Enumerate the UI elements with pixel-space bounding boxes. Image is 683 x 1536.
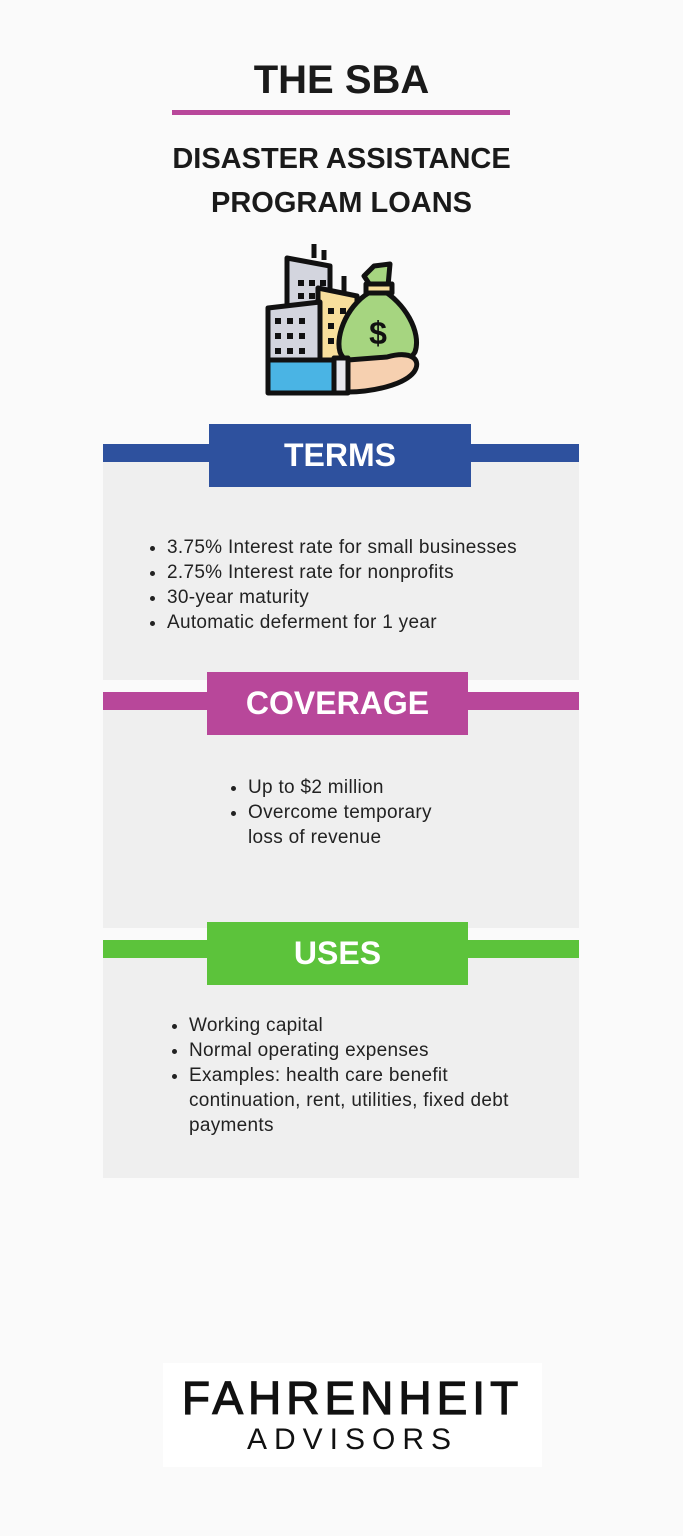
text: uses list: Working capital: [189, 1015, 323, 1036]
text: terms list: 2.75% Interest rate for nonprofits: [167, 562, 454, 583]
icon: buildings and money bag: [266, 244, 420, 396]
text: terms list: [150, 537, 517, 633]
heading: terms: TERMS: [284, 437, 396, 473]
text: uses list: Examples: health care benefit: [189, 1065, 448, 1086]
subtitle: PROGRAM LOANS: [211, 187, 472, 219]
logo: Fahrenheit Advisors: FAHRENHEIT: [182, 1372, 523, 1424]
heading: coverage: [207, 672, 468, 735]
text: coverage list: loss of revenue: [248, 827, 381, 848]
text: uses list: [172, 1015, 509, 1136]
divider line: [172, 110, 510, 115]
text: uses list: Normal operating expenses: [189, 1040, 429, 1061]
heading: coverage: COVERAGE: [246, 685, 429, 721]
title: THE SBA: [254, 58, 429, 102]
panel: uses: [103, 922, 579, 1178]
text: uses list: continuation, rent, utilities, fixed debt: [189, 1090, 509, 1111]
subtitle: DISASTER ASSISTANCE: [172, 143, 511, 175]
heading: uses: USES: [294, 935, 381, 971]
heading: uses: [207, 922, 468, 985]
logo: Fahrenheit Advisors: ADVISORS: [247, 1423, 458, 1456]
panel: terms: [103, 424, 579, 680]
text: terms list: Automatic deferment for 1 year: [167, 612, 437, 633]
panel: coverage: [103, 672, 579, 928]
icon: buildings and money bag: $: [369, 315, 387, 351]
text: coverage list: [231, 777, 432, 848]
subtitle: [172, 143, 511, 219]
text: uses list: payments: [189, 1115, 274, 1136]
heading: terms: [209, 424, 471, 487]
text: terms list: 30-year maturity: [167, 587, 309, 608]
text: terms list: 3.75% Interest rate for small businesses: [167, 537, 517, 558]
text: coverage list: Overcome temporary: [248, 802, 432, 823]
logo: Fahrenheit Advisors: [163, 1363, 542, 1467]
text: coverage list: Up to $2 million: [248, 777, 384, 798]
